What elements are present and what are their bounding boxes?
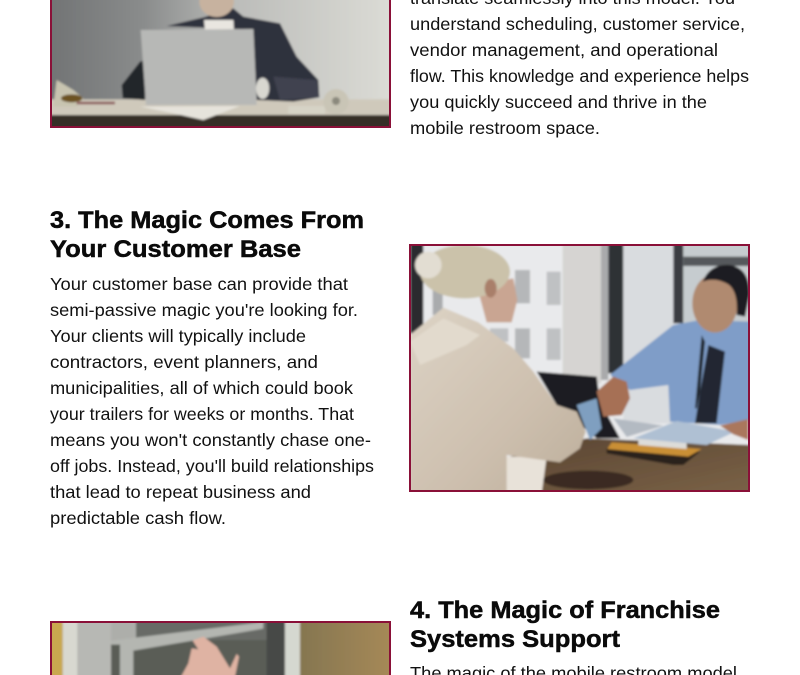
heading: section 4 xyxy=(410,597,720,653)
text block: section 3 paragraph: your trailers for weeks or months. That xyxy=(50,404,354,424)
text block: section 3 paragraph xyxy=(50,274,374,528)
heading: section 4: Systems Support xyxy=(410,626,620,653)
text block: section 3 paragraph: contractors, event planners, and xyxy=(50,352,318,372)
photo: team high five hands xyxy=(47,617,397,675)
text block: section 3 paragraph: that lead to repeat business and xyxy=(50,482,311,502)
text block: section 2 closing paragraph: you quickly succeed and thrive in the xyxy=(410,92,707,112)
text block: section 2 closing paragraph: understand scheduling, customer service, xyxy=(410,14,745,34)
photo: businessman at laptop xyxy=(47,0,393,128)
text block: section 3 paragraph: Your clients will typically include xyxy=(50,326,306,346)
photo: two people shaking hands across a desk xyxy=(407,242,753,495)
text block: section 3 paragraph: means you won't constantly chase one- xyxy=(50,430,371,450)
text block: section 3 paragraph: Your customer base can provide that xyxy=(50,274,348,294)
text block: section 3 paragraph: semi-passive magic you're looking for. xyxy=(50,300,358,320)
text block: section 2 closing paragraph xyxy=(410,0,749,138)
heading: section 3: Your Customer Base xyxy=(50,236,301,263)
text block: section 3 paragraph: off jobs. Instead, you'll build relationships xyxy=(50,456,374,476)
text block: section 3 paragraph: municipalities, all of which could book xyxy=(50,378,353,398)
text block: section 2 closing paragraph: mobile restroom space. xyxy=(410,118,600,138)
heading: section 3: 3. The Magic Comes From xyxy=(50,207,364,234)
heading: section 4: 4. The Magic of Franchise xyxy=(410,597,720,624)
text block: section 2 closing paragraph: flow. This knowledge and experience helps xyxy=(410,66,749,86)
text block: section 2 closing paragraph: vendor management, and operational xyxy=(410,40,718,60)
heading: section 3 xyxy=(50,207,364,263)
text block: section 3 paragraph: predictable cash flow. xyxy=(50,508,226,528)
